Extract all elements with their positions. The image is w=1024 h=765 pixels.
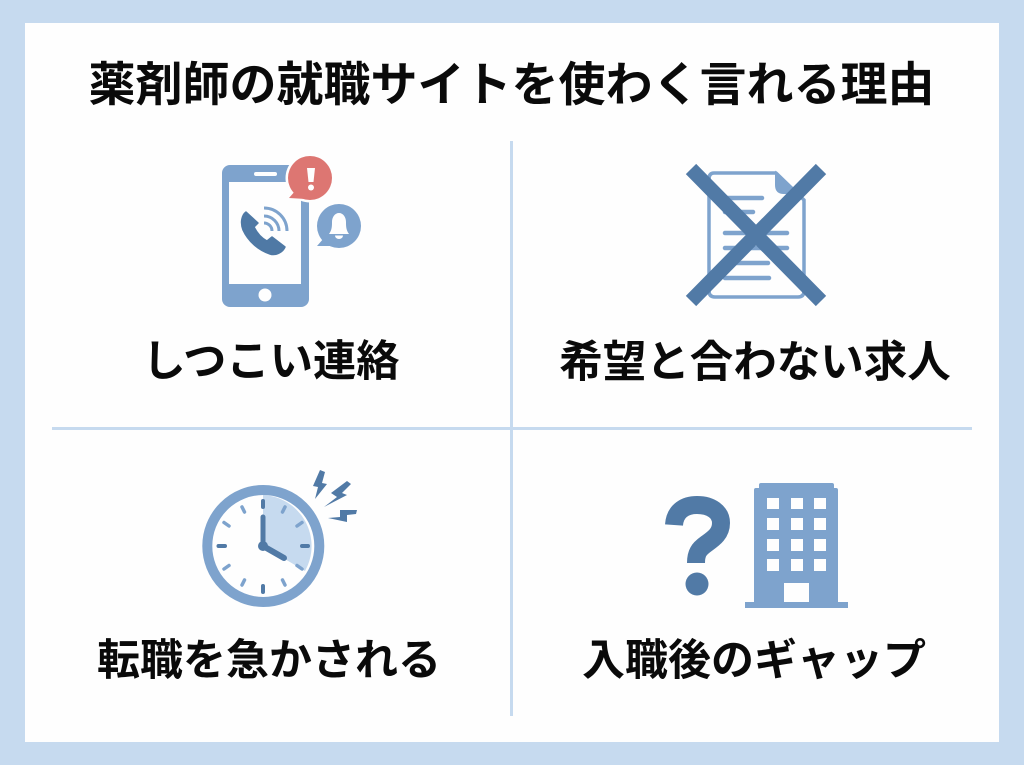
phone body	[222, 165, 309, 307]
icon: clock	[207, 470, 357, 602]
bell bubble	[317, 204, 361, 248]
label: 入職後のギャップ	[582, 637, 926, 685]
lightning bolts	[313, 470, 357, 522]
cross	[691, 169, 821, 301]
label: 希望と合わない求人	[559, 339, 951, 387]
icon: question mark and building	[674, 483, 848, 608]
building	[745, 483, 848, 608]
icon: crossed-out document	[691, 169, 821, 301]
panel: rushed job change	[97, 470, 441, 685]
title: 薬剤師の就職サイトを使わく言れる理由	[88, 58, 934, 111]
alert bubble	[286, 154, 334, 202]
label: 転職を急かされる	[97, 637, 441, 685]
clock ring	[207, 490, 319, 602]
document	[709, 173, 804, 297]
label: しつこい連絡	[142, 338, 400, 386]
phone handset and signal	[242, 208, 287, 255]
panel: post-hire gap	[582, 483, 926, 685]
question mark	[674, 505, 721, 596]
clock hands	[260, 517, 266, 546]
panel: unsuitable job listings	[559, 169, 951, 387]
icon: smartphone with alerts	[222, 154, 361, 307]
elapsed wedge	[263, 495, 312, 571]
panel: persistent contact	[142, 154, 400, 386]
